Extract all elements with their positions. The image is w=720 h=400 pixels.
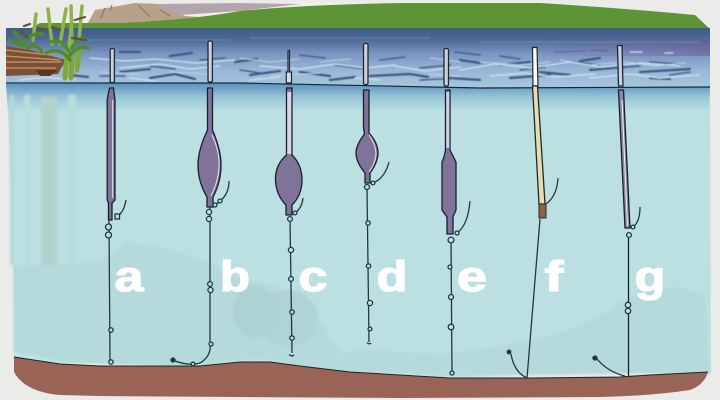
float g antenna (618, 46, 623, 86)
float d antenna (364, 44, 368, 84)
lakebed weeds and silhouettes (14, 241, 709, 378)
float f collar (539, 204, 546, 218)
label e: e (457, 253, 487, 301)
purple tint on the right of the water (540, 36, 710, 56)
float e upper stem (446, 92, 449, 148)
mud outline (14, 357, 708, 378)
float c rig (288, 198, 303, 356)
float b antenna (208, 41, 212, 82)
float a (106, 48, 126, 364)
float f (507, 48, 558, 378)
float a rig (106, 200, 126, 364)
float a highlight (112, 100, 114, 198)
float e antenna (444, 48, 448, 86)
float d highlight (369, 135, 376, 172)
float g highlight (622, 100, 628, 226)
float b body (198, 88, 221, 207)
label f: f (544, 253, 564, 301)
far green shore (24, 3, 710, 32)
float f stem (532, 86, 545, 204)
float e rig (448, 201, 470, 375)
label d: d (376, 253, 408, 301)
float e body (442, 90, 456, 234)
lakebed mud (14, 357, 708, 398)
wooden jetty (6, 46, 66, 76)
float c body (275, 88, 302, 215)
label b: b (220, 253, 250, 301)
float c antenna (286, 50, 292, 83)
distant hills (84, 3, 300, 30)
ripples (20, 38, 700, 81)
float f antenna (532, 48, 538, 86)
sky (14, 2, 710, 60)
float e (442, 48, 470, 375)
float b (171, 41, 229, 366)
underwater top gradient (6, 83, 710, 112)
float c upper stem (287, 92, 291, 154)
float d rig (364, 162, 389, 344)
label a: a (114, 253, 145, 301)
float g (593, 46, 640, 377)
float b rig (171, 181, 229, 366)
float c (275, 50, 303, 356)
float b highlight (211, 135, 219, 196)
reeds (10, 6, 88, 78)
float d body (356, 90, 378, 183)
submerged pilings (10, 95, 76, 269)
underwater body (6, 83, 711, 374)
float f rig (507, 178, 558, 378)
float g stem (618, 90, 630, 228)
label g: g (634, 253, 666, 301)
float a antenna (110, 48, 114, 82)
surface water (6, 28, 710, 88)
waterline (6, 83, 710, 88)
float a body (107, 88, 115, 220)
label c: c (298, 253, 328, 301)
float g rig (593, 207, 640, 377)
float d (356, 44, 389, 344)
